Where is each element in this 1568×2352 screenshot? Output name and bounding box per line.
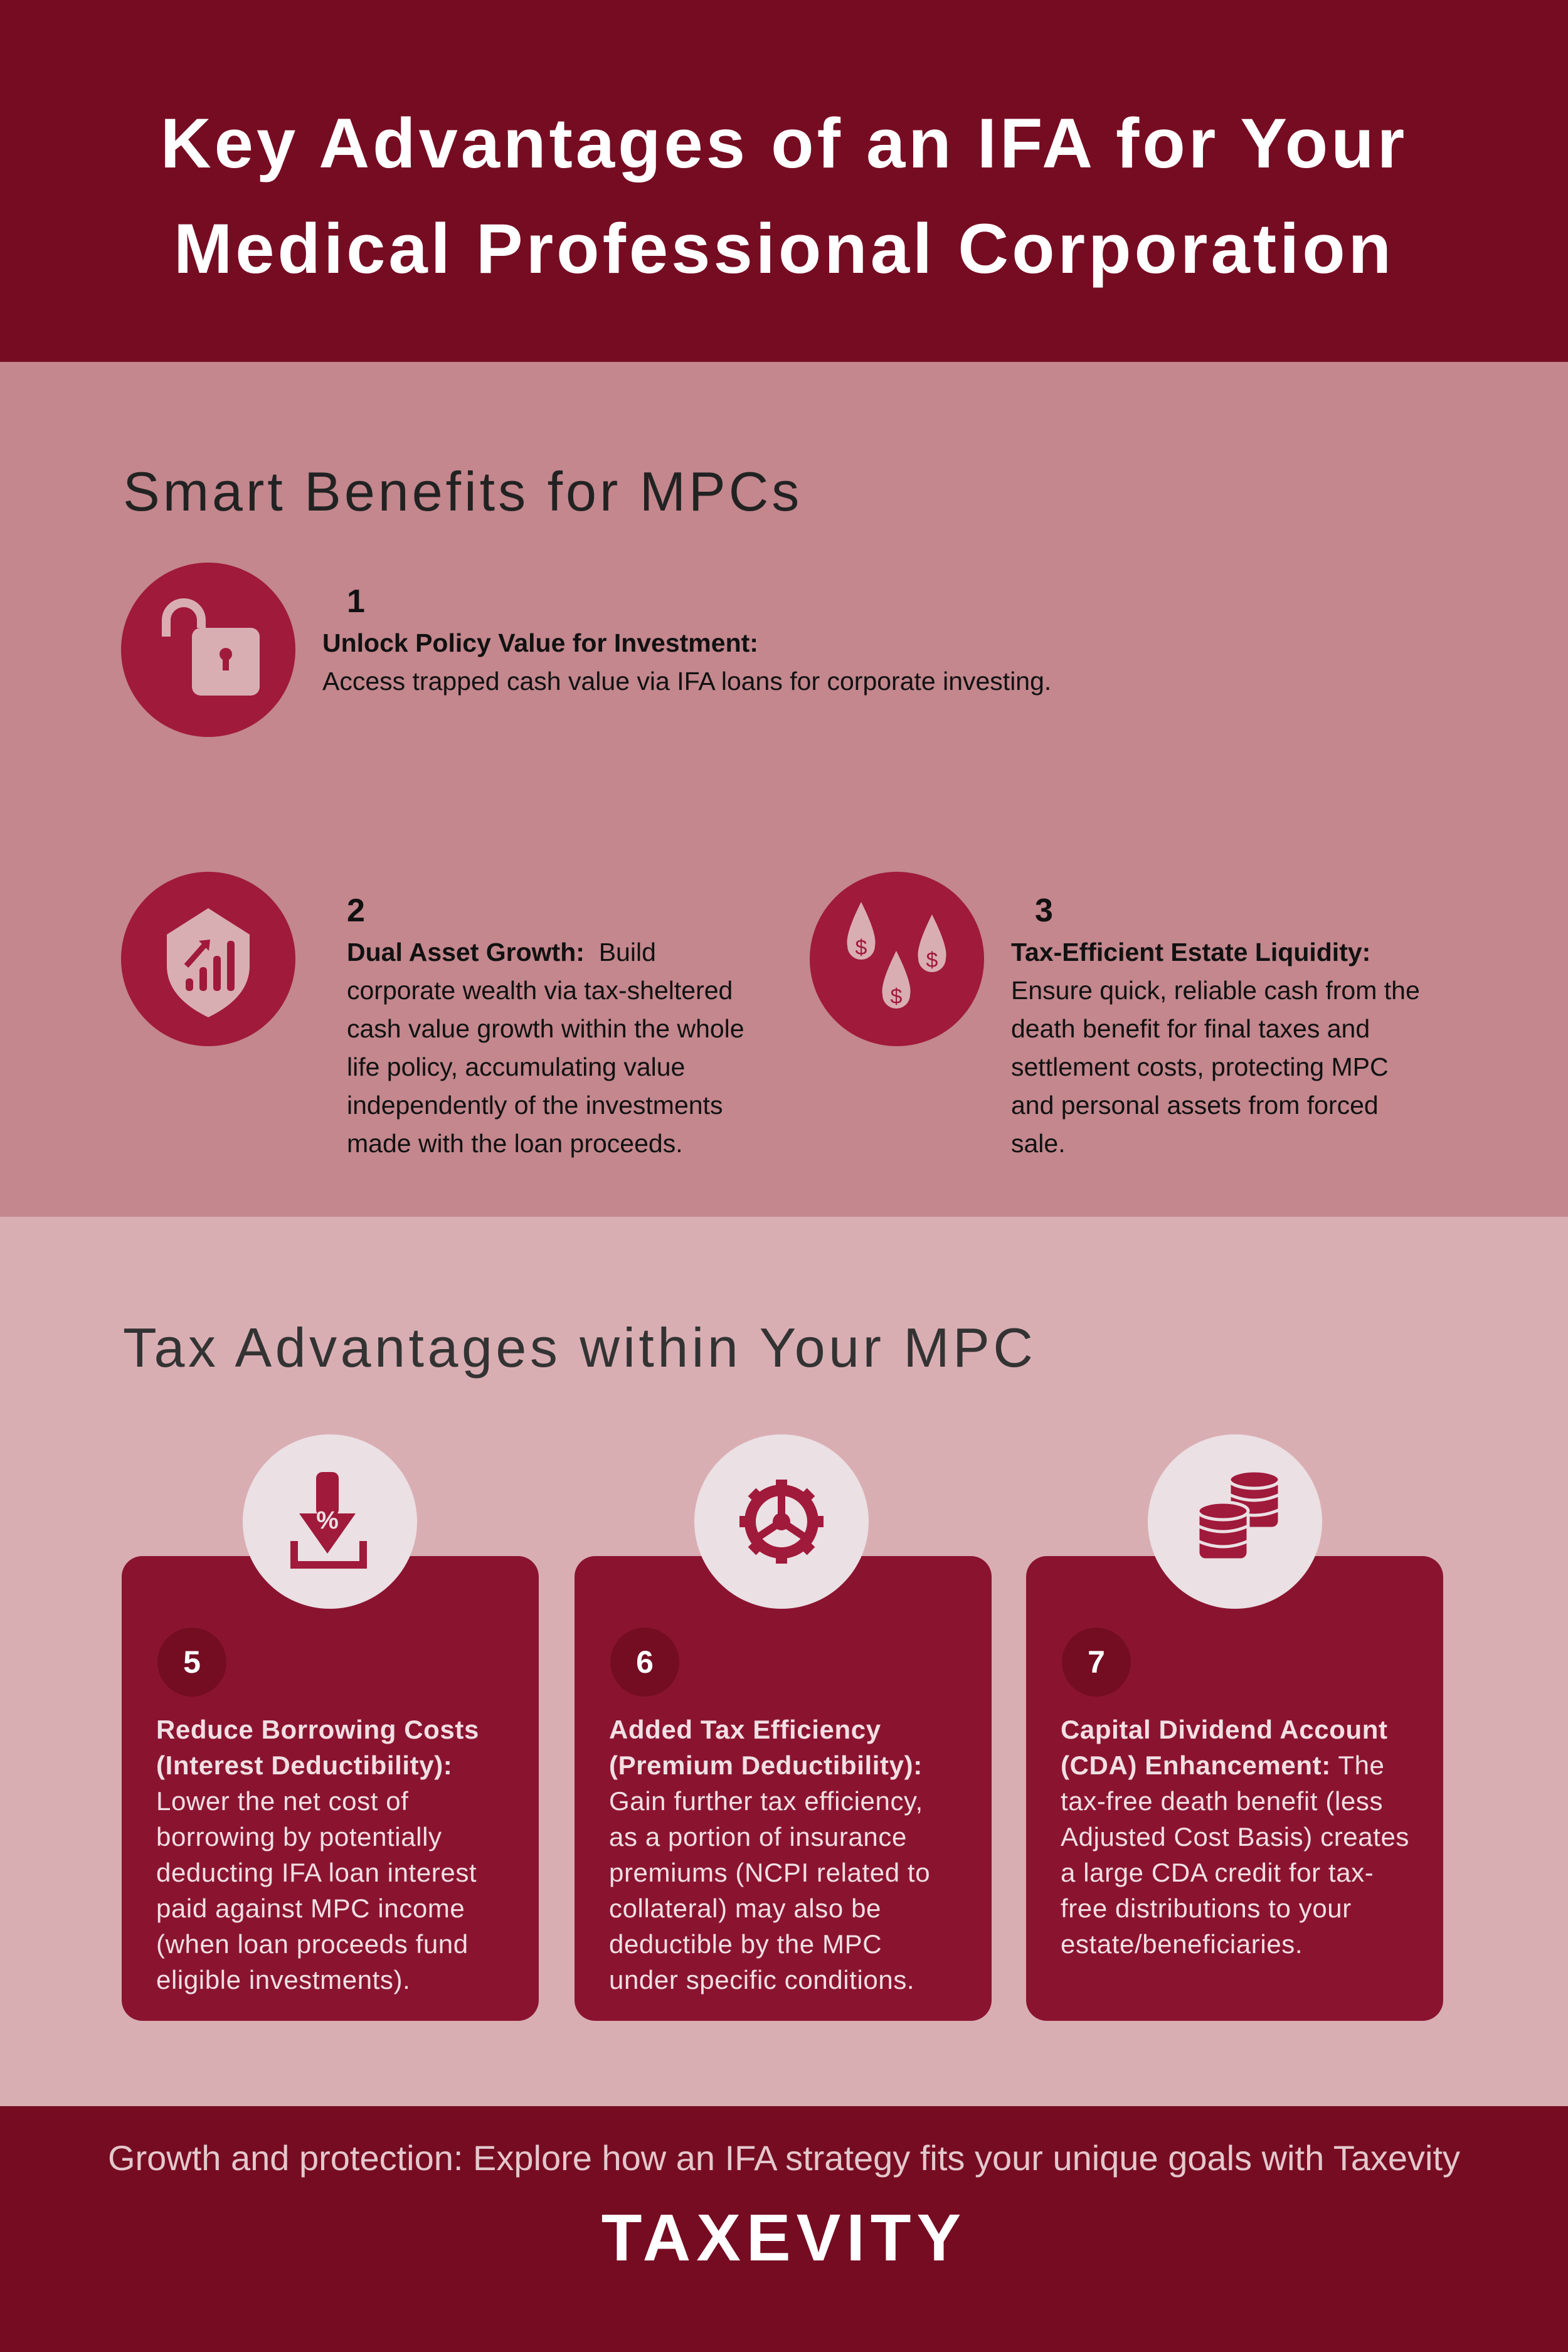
item 1 text	[322, 583, 1051, 696]
item 3 text	[1011, 893, 1420, 1158]
item 2 text: independently of the investments	[347, 1091, 723, 1120]
item 1 text: Access trapped cash value via IFA loans for corporate investing.	[322, 667, 1051, 696]
item 3 text: settlement costs, protecting MPC	[1011, 1052, 1389, 1081]
card 5: deducting IFA loan interest	[156, 1858, 477, 1887]
card 7: free distributions to your	[1061, 1894, 1352, 1923]
item 2 text: made with the loan proceeds.	[347, 1129, 683, 1158]
card 6	[575, 1556, 992, 2021]
card 7: estate/beneficiaries.	[1061, 1929, 1303, 1959]
card 7: Adjusted Cost Basis) creates	[1061, 1822, 1409, 1851]
item 2 text: corporate wealth via tax-sheltered	[347, 976, 733, 1005]
logo: TAXEVITY: TAXEVITY	[601, 2201, 967, 2275]
card 5: eligible investments).	[156, 1965, 410, 1994]
icon: money drops: $	[856, 936, 867, 960]
icon: percent down arrow: %	[316, 1507, 339, 1534]
item 3 text: death benefit for final taxes and	[1011, 1014, 1370, 1043]
item 3 text: Tax-Efficient Estate Liquidity:	[1011, 938, 1370, 967]
tagline: Growth and protection: Explore how an IFA strategy fits your unique goals with Taxevity	[108, 2138, 1460, 2178]
icon: shield growth	[121, 872, 295, 1046]
item 2 text: cash value growth within the whole	[347, 1014, 744, 1043]
panel: smart benefits	[0, 362, 1568, 1217]
card 7: 7	[1088, 1645, 1105, 1680]
item 3 text: and personal assets from forced	[1011, 1091, 1379, 1120]
icon: money drops: $	[926, 948, 938, 972]
card 5	[122, 1556, 539, 2021]
icon: money drops	[810, 872, 984, 1046]
item 2 text	[347, 893, 744, 1158]
title: Medical Professional Corporation	[174, 209, 1394, 288]
card 6: (Premium Deductibility):	[609, 1751, 923, 1780]
item 3 text: Ensure quick, reliable cash from the	[1011, 976, 1420, 1005]
card 5: 5	[183, 1645, 201, 1680]
header band	[0, 0, 1568, 362]
icon: unlock	[121, 563, 295, 737]
item 3 text: 3	[1035, 893, 1053, 929]
title	[161, 104, 1407, 288]
title: Key Advantages of an IFA for Your	[161, 104, 1407, 183]
item 2 text: life policy, accumulating value	[347, 1052, 685, 1081]
card 5: Lower the net cost of	[156, 1786, 409, 1816]
card 6: Gain further tax efficiency,	[609, 1786, 923, 1816]
item 2 text: 2	[347, 893, 365, 929]
footer band	[0, 2106, 1568, 2352]
icon: percent down arrow	[243, 1434, 417, 1609]
icon: coins	[1148, 1434, 1322, 1609]
panel: tax advantages	[0, 1217, 1568, 2106]
card 6: premiums (NCPI related to	[609, 1858, 930, 1887]
card 5: Reduce Borrowing Costs	[156, 1715, 479, 1744]
card 6: collateral) may also be	[609, 1894, 881, 1923]
card 5: (when loan proceeds fund	[156, 1929, 469, 1959]
card 6: Added Tax Efficiency	[609, 1715, 881, 1744]
card 7: (CDA) Enhancement: The	[1061, 1751, 1385, 1780]
card 7: Capital Dividend Account	[1061, 1715, 1388, 1744]
item 1 text: Unlock Policy Value for Investment:	[322, 628, 758, 657]
item 1 text: 1	[347, 583, 365, 620]
card 6: as a portion of insurance	[609, 1822, 907, 1851]
icon: gear	[694, 1434, 869, 1609]
card 7: a large CDA credit for tax-	[1061, 1858, 1374, 1887]
heading: smart benefits: Smart Benefits for MPCs	[123, 460, 802, 522]
card 6: 6	[636, 1645, 654, 1680]
card 7	[1026, 1556, 1443, 2021]
card 6: under specific conditions.	[609, 1965, 914, 1994]
item 2 text: Dual Asset Growth: Build	[347, 938, 656, 967]
card 5: borrowing by potentially	[156, 1822, 442, 1851]
card 7: tax-free death benefit (less	[1061, 1786, 1383, 1816]
item 3 text: sale.	[1011, 1129, 1066, 1158]
heading: tax advantages: Tax Advantages within Your MPC	[123, 1316, 1036, 1379]
icon: money drops: $	[891, 985, 903, 1009]
card 5: paid against MPC income	[156, 1894, 465, 1923]
card 6: deductible by the MPC	[609, 1929, 882, 1959]
card 5: (Interest Deductibility):	[156, 1751, 452, 1780]
